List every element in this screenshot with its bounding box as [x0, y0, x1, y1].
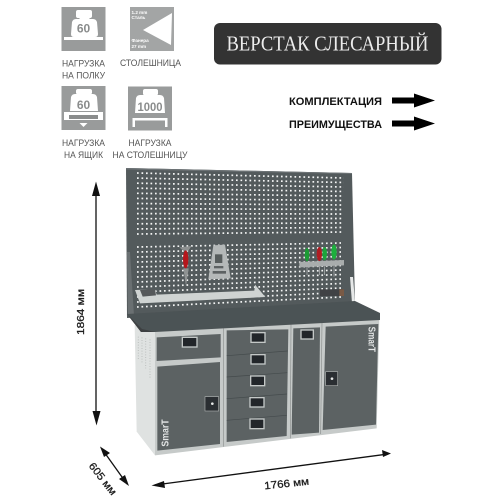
- link: equipment: КОМПЛЕКТАЦИЯ: [289, 96, 382, 108]
- icon: shelf load 60: [62, 7, 106, 51]
- label: tabletop: СТОЛЕШНИЦА: [120, 58, 182, 69]
- icon: tabletop: 27 mm: [132, 44, 146, 49]
- long tray shelf: [135, 285, 265, 303]
- small tool shelf with screwdrivers: [299, 244, 344, 277]
- side vents: [138, 337, 150, 378]
- link: equipment: [289, 94, 435, 108]
- brand: left door: SmarT: [161, 419, 172, 447]
- top drawer: [157, 334, 221, 361]
- link: advantages: ПРЕИМУЩЕСТВА: [289, 119, 382, 131]
- right door: [323, 324, 378, 430]
- icon: tabletop: [130, 7, 174, 51]
- icon: drawer load 60: 60: [77, 98, 90, 112]
- icon: tabletop: 1.2 mm: [132, 10, 147, 15]
- tabletop: [127, 301, 380, 332]
- pegboard back panel: [126, 168, 355, 318]
- lower perforation: [137, 243, 341, 307]
- column gaps: [223, 323, 322, 447]
- label: drawer load: НАГРУЗКА: [62, 138, 106, 149]
- dimension: width: 1766 мм: [264, 476, 310, 492]
- brand plate on board: [320, 289, 344, 296]
- upper perforation: [137, 173, 344, 234]
- brand: right door: SmarT: [366, 327, 377, 352]
- title: ВЕРСТАК СЛЕСАРНЫЙ: [226, 32, 428, 56]
- icon: drawer load 60: [62, 86, 106, 130]
- side braces: [127, 252, 355, 316]
- label: shelf load second line: НА ПОЛКУ: [62, 70, 106, 82]
- dimension: height: 1864 мм: [75, 289, 87, 335]
- icon: shelf load 60: 60: [77, 22, 90, 36]
- icon: tabletop load 1000: 1000: [138, 100, 163, 114]
- label: drawer load second line: НА ЯЩИК: [64, 150, 103, 161]
- label: shelf load: НАГРУЗКА: [62, 58, 106, 70]
- label: tabletop load second line: НА СТОЛЕШНИЦУ: [112, 150, 188, 161]
- hanging screwdriver: [179, 246, 192, 286]
- icon: tabletop: Фанера: [132, 38, 149, 43]
- icon: tabletop: Сталь: [132, 15, 146, 20]
- icon: tabletop load 1000: [128, 86, 172, 130]
- label: tabletop load: НАГРУЗКА: [128, 138, 172, 149]
- workbench illustration: [126, 168, 380, 455]
- left door: [157, 362, 220, 451]
- link: advantages: [289, 116, 435, 131]
- narrow door: [292, 327, 320, 435]
- title: [214, 23, 442, 64]
- dimension: depth: [86, 446, 129, 498]
- dimension: height: [75, 182, 100, 426]
- dimension: width: [152, 450, 391, 492]
- five drawers column: [227, 329, 288, 442]
- stepped holder: [208, 245, 231, 279]
- drawer handles: [182, 329, 314, 429]
- door locks: [205, 372, 338, 411]
- dimension: depth: 605 мм: [86, 460, 119, 498]
- cabinet body: [135, 319, 379, 455]
